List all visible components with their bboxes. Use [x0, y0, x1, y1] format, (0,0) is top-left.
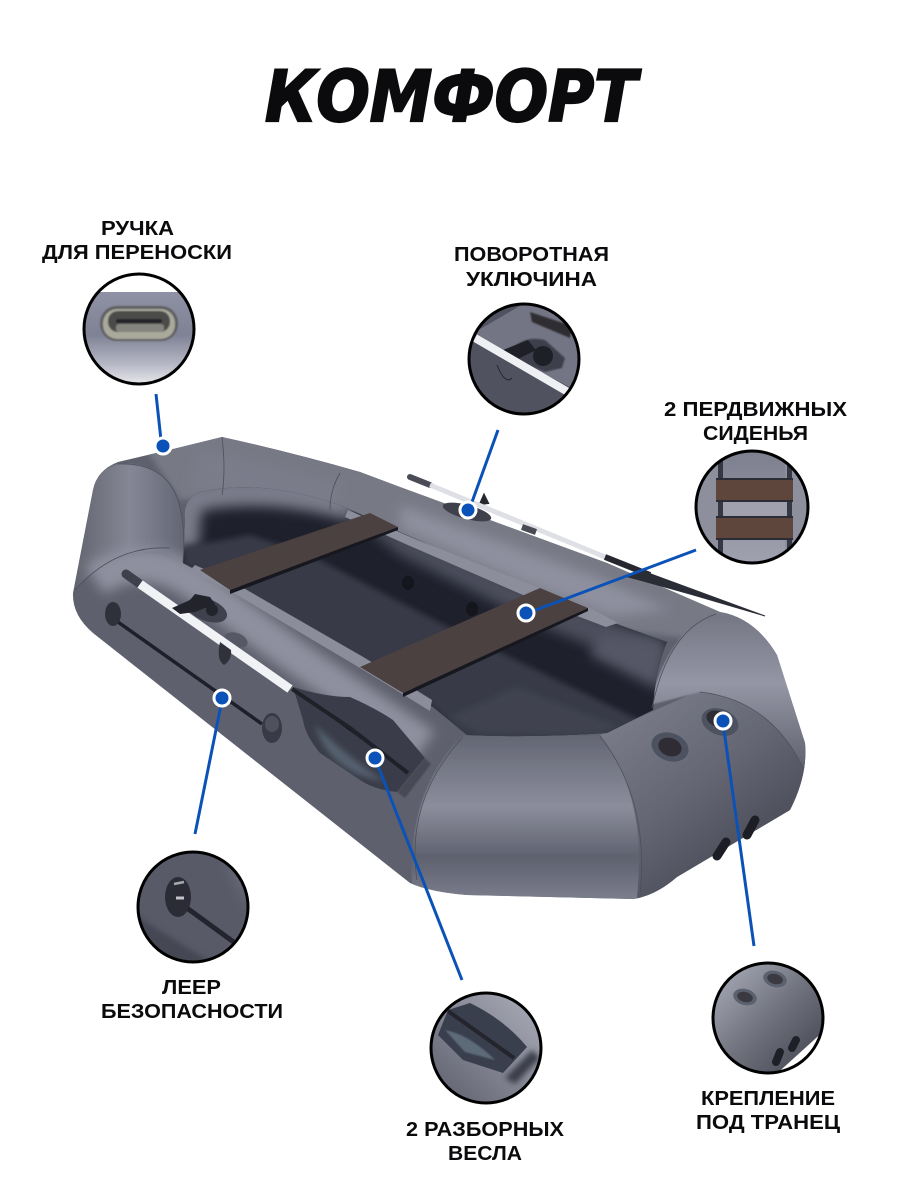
- callout: transom mount: [696, 713, 840, 1134]
- stern fittings: [717, 842, 726, 856]
- thumbnail: [86, 292, 192, 382]
- label: [101, 977, 283, 1023]
- callout: safety rail: [101, 690, 283, 1023]
- near oarlock plate: [184, 592, 230, 628]
- label: [406, 1119, 565, 1165]
- near oar shaft: [126, 574, 140, 584]
- inflatable boat: [73, 430, 812, 905]
- far wall shade: [360, 514, 658, 650]
- label: ПОД ТРАНЕЦ: [696, 1112, 840, 1134]
- thumbnail: [698, 452, 806, 562]
- marker dot: [367, 750, 383, 766]
- marker dot: [715, 713, 731, 729]
- seat front: [360, 588, 588, 693]
- label: ВЕСЛА: [448, 1143, 522, 1165]
- bow upper section: [650, 614, 810, 768]
- title: КОМФОРТ: [265, 56, 642, 138]
- label: УКЛЮЧИНА: [466, 269, 597, 291]
- label: 2 ПЕРДВИЖНЫХ: [664, 399, 848, 421]
- label: [696, 1088, 840, 1134]
- marker dot: [214, 690, 230, 706]
- near tube top light band: [95, 565, 425, 745]
- callout: carrying handle: [42, 218, 232, 454]
- thumbnail: [470, 306, 578, 412]
- cockpit: [183, 487, 667, 736]
- inner wall valves: [402, 576, 414, 590]
- far oarlock mount: [441, 499, 493, 525]
- bow lower section: [600, 690, 812, 905]
- label: 2 РАЗБОРНЫХ: [406, 1119, 565, 1141]
- label: [664, 399, 848, 445]
- leader line: [472, 430, 498, 502]
- far tube top: [140, 430, 760, 640]
- marker dot: [460, 502, 476, 518]
- floor: [183, 535, 660, 745]
- label: [454, 244, 609, 291]
- hull: [73, 437, 805, 899]
- far oar: [410, 477, 430, 485]
- leader line: [156, 394, 161, 440]
- stern rounded end: [75, 464, 184, 590]
- thumbnail: [432, 994, 540, 1102]
- seat rear: [200, 513, 398, 590]
- leader line: [724, 730, 754, 946]
- leader line: [195, 700, 222, 834]
- marker dot: [518, 605, 534, 621]
- marker dot: [155, 438, 171, 454]
- label: ЛЕЕР: [162, 977, 221, 999]
- callout: sliding seats: [518, 399, 848, 621]
- callout: collapsible oars: [367, 750, 565, 1165]
- label: БЕЗОПАСНОСТИ: [101, 1001, 283, 1023]
- gunwale strips: [345, 510, 618, 627]
- bow wall shade: [590, 635, 668, 690]
- label: СИДЕНЬЯ: [703, 423, 808, 445]
- label: РУЧКА: [101, 218, 174, 240]
- bow transom mounts: [647, 703, 742, 767]
- label: ДЛЯ ПЕРЕНОСКИ: [42, 242, 232, 264]
- front tube section: [412, 735, 641, 905]
- callout: swivel oarlock: [454, 244, 609, 518]
- label: [42, 218, 232, 264]
- rear wall shade: [175, 485, 350, 540]
- label: ПОВОРОТНАЯ: [454, 244, 609, 266]
- label: КРЕПЛЕНИЕ: [701, 1088, 835, 1110]
- leader line: [378, 766, 462, 980]
- seam lines: [75, 437, 803, 895]
- near oar blade: [293, 687, 425, 792]
- leader line: [533, 550, 696, 611]
- thumbnail: [714, 964, 822, 1072]
- safety rail: [118, 622, 262, 724]
- thumbnail: [140, 854, 246, 960]
